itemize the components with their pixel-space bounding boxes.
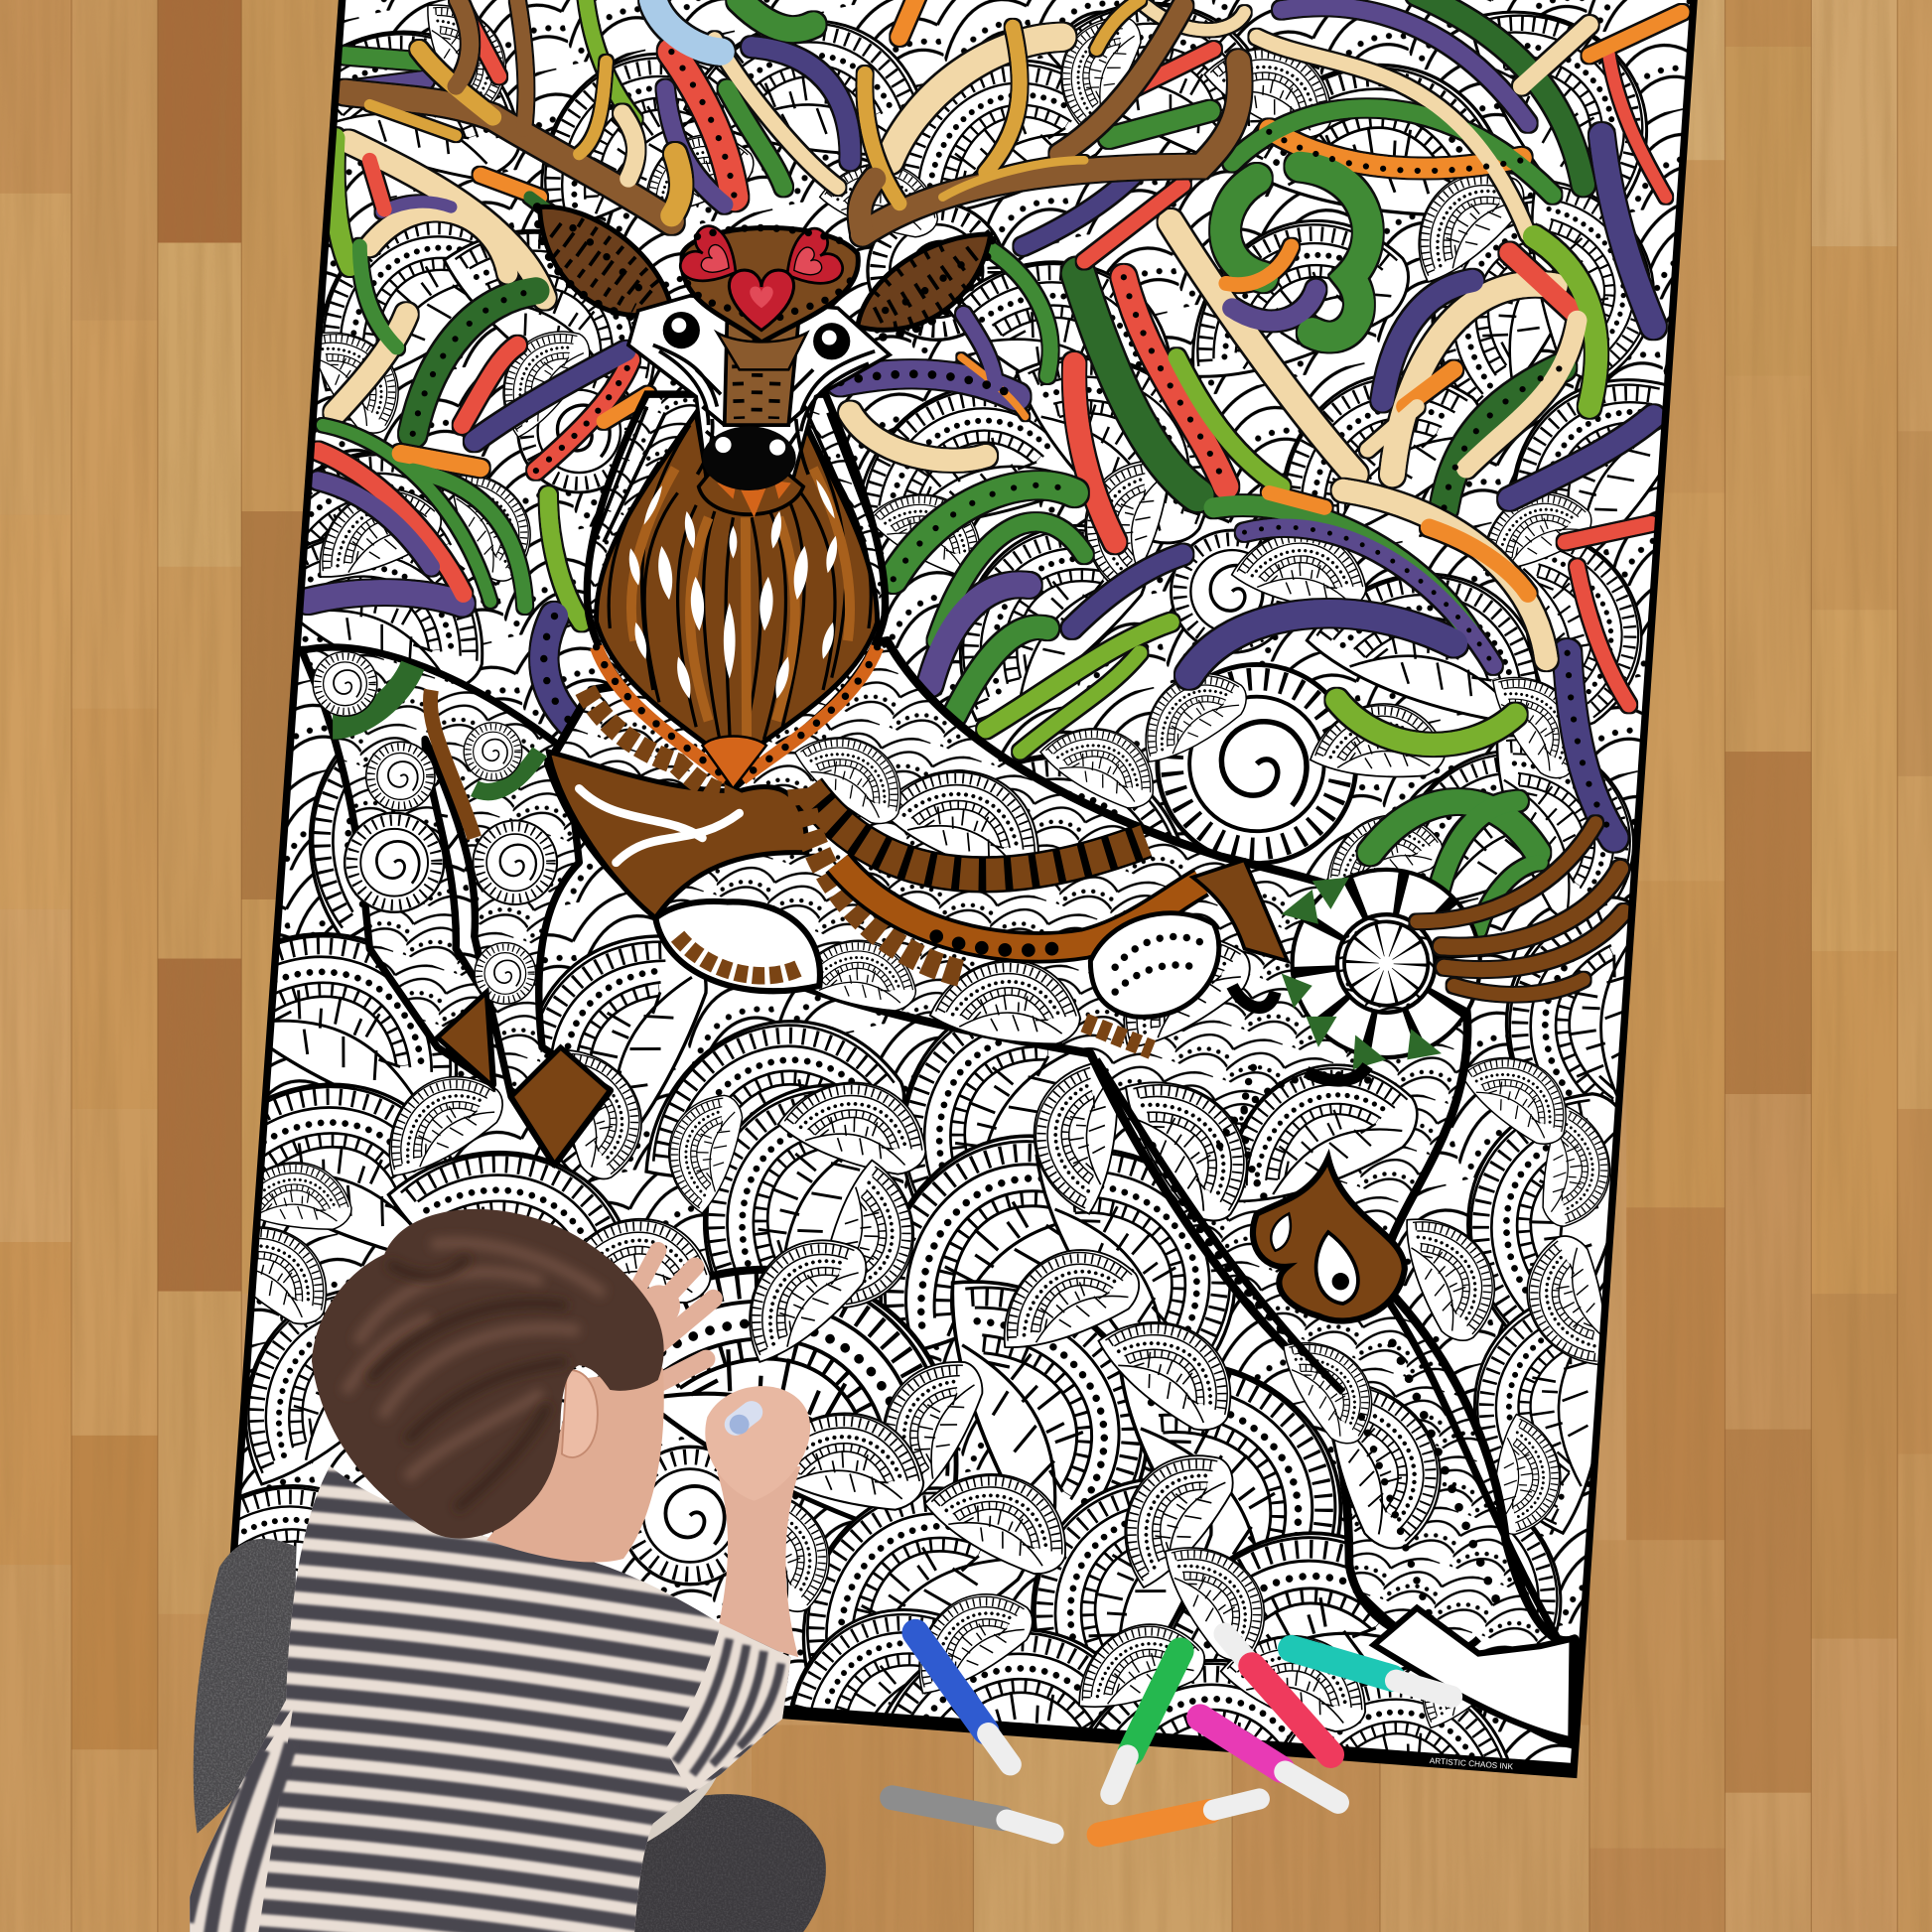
left ear	[537, 207, 671, 321]
icon: front hoof left	[438, 992, 492, 1087]
bands: upper right	[1171, 0, 1682, 838]
nose	[702, 426, 796, 490]
raised hand fingers	[617, 1251, 714, 1392]
centre heart inner	[750, 286, 773, 308]
centre heart	[729, 270, 794, 331]
brown petal row	[807, 788, 1146, 875]
coloured leaf bands	[308, 0, 1682, 930]
deer illustration	[302, 0, 1624, 1743]
neck side hatch	[589, 407, 883, 554]
deer chest	[586, 394, 886, 793]
band dot details	[413, 52, 1614, 838]
hair	[312, 1209, 664, 1539]
bands: right centre leaf group	[1074, 274, 1547, 930]
shirt lower left fold	[179, 1707, 293, 1932]
hind brown paisley	[1253, 1159, 1405, 1321]
forehead	[682, 227, 858, 343]
deer antlers	[345, 0, 1240, 234]
hind leg droplets	[1152, 1146, 1330, 1380]
child figure	[160, 1209, 826, 1932]
hind leg inner line	[1097, 1059, 1565, 1652]
orange band with dots	[838, 863, 1201, 947]
marker: red	[1225, 1634, 1330, 1754]
sleeve stripes	[665, 1624, 791, 1793]
deer torso and hind leg	[548, 640, 1575, 1743]
chest orange trim	[597, 647, 878, 778]
striped shirt	[160, 1453, 813, 1932]
paisley on shoulder	[655, 901, 820, 991]
forehead white dots	[688, 228, 850, 318]
drawing fist	[705, 1386, 810, 1501]
marker: magenta	[1200, 1718, 1338, 1803]
brand text: ARTISTIC CHAOS INK	[1429, 1756, 1514, 1771]
poster sheet	[167, 0, 1725, 1819]
hind hoof	[1374, 1608, 1573, 1739]
bands: centre leaf	[840, 173, 1182, 752]
muzzle	[699, 475, 803, 514]
neck scroll	[586, 690, 733, 793]
child knee left	[194, 1539, 296, 1834]
deer tail	[1417, 823, 1624, 995]
deer head	[537, 207, 992, 554]
child leg right	[628, 1794, 826, 1932]
marker: blue	[915, 1632, 1011, 1764]
shirt hem	[640, 1749, 727, 1842]
side heart left	[676, 221, 750, 297]
right eye	[813, 323, 850, 359]
paint markers	[893, 1632, 1451, 1835]
face	[628, 296, 890, 486]
small leaf detail layer	[201, 0, 1620, 1744]
paisley on haunch	[1090, 913, 1219, 1017]
bands: top centre	[586, 0, 1244, 205]
bands: upper left	[335, 6, 648, 471]
deer raised front legs	[302, 647, 610, 1165]
snout bridge	[725, 323, 798, 425]
marker: green	[1111, 1651, 1180, 1794]
marker: orange	[1099, 1799, 1259, 1835]
left eye	[663, 312, 700, 348]
line art leaf background	[167, 0, 1725, 1819]
marker: teal	[1292, 1649, 1451, 1697]
side heart left inner	[699, 242, 736, 280]
icon: front hoof right	[511, 1047, 610, 1165]
bands: left leaf	[308, 425, 582, 721]
side heart right	[773, 223, 847, 300]
mandala on haunch	[1232, 878, 1457, 1080]
marker: grey	[893, 1798, 1053, 1834]
poster bottom edge	[225, 1671, 1574, 1769]
neck and face	[486, 1368, 664, 1563]
marker in hand	[730, 1412, 752, 1435]
poster border	[225, 0, 1694, 1774]
dots on hip	[1220, 1075, 1380, 1146]
ear	[562, 1370, 598, 1457]
side heart right inner	[787, 245, 824, 283]
brown shoulder scroll	[548, 752, 807, 918]
drawing arm	[717, 1466, 801, 1657]
right ear	[858, 234, 992, 338]
